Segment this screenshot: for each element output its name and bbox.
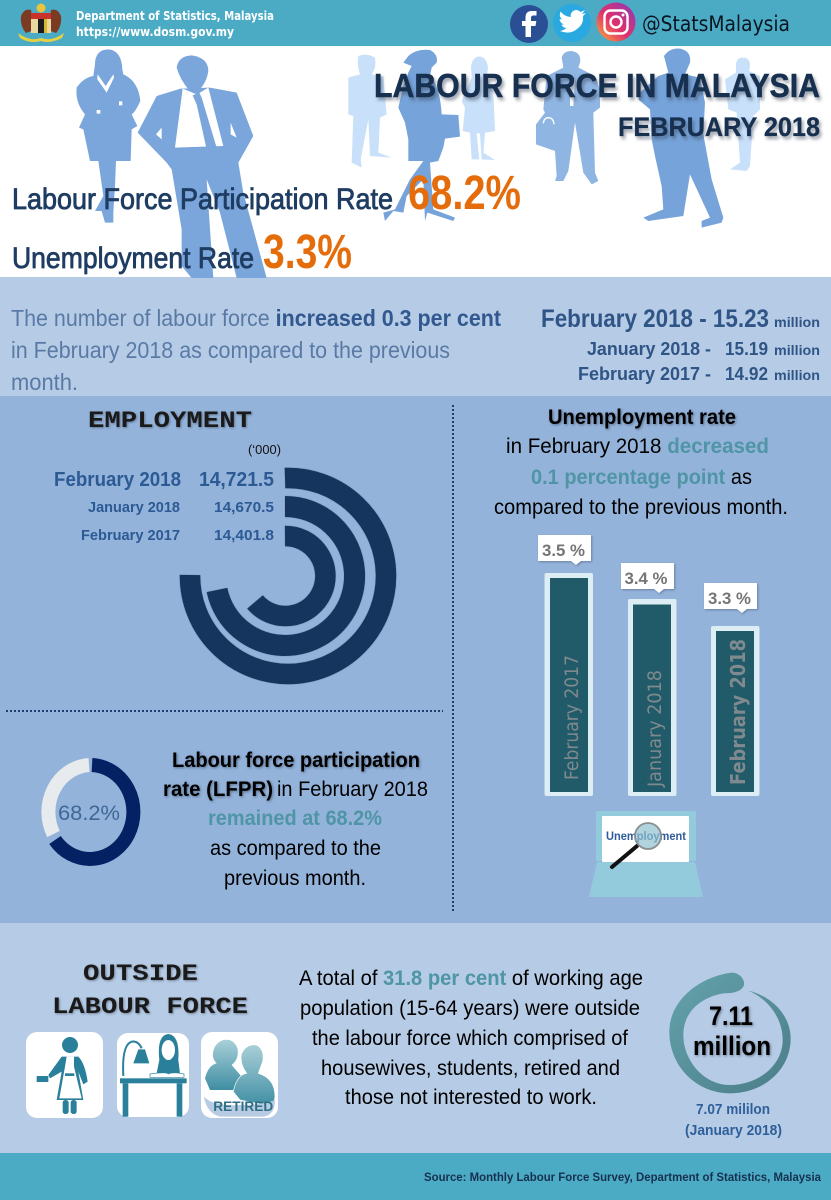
pale figure: man right [725, 58, 760, 171]
outside labour force heading: OUTSIDE [83, 961, 198, 987]
icon: instagram [596, 2, 636, 42]
panel: employment [54, 408, 386, 674]
headline rates: 3.3% [263, 226, 352, 279]
icon: Malaysian coat of arms [18, 4, 64, 42]
ring: 7.11 million [669, 973, 791, 1139]
left group: woman and man [76, 49, 267, 278]
employment table: 14,721.5 [199, 469, 274, 491]
employment table: 14,670.5 [214, 499, 274, 516]
ring: 7.11 million: 7.11 [709, 1001, 753, 1031]
title [374, 67, 820, 142]
figure: man right [638, 49, 723, 228]
callout: 3.4 %: 3.4 % [624, 569, 668, 588]
outside labour force text: those not interested to work. [345, 1086, 597, 1109]
labour force figures: January 2018 - [587, 339, 711, 359]
bar: February 2018: February 2018 [726, 639, 750, 785]
employment table: February 2017 [81, 527, 180, 544]
footer [0, 1153, 831, 1200]
labour force figures: 14.92 [725, 364, 768, 384]
labour force figures: 15.19 [725, 339, 768, 359]
labour force figures: million [774, 342, 820, 358]
icon: retired [201, 1032, 278, 1118]
bar: February 2018 [711, 626, 760, 796]
figure: man left [138, 55, 267, 278]
outside labour force text: housewives, students, retired and [321, 1057, 620, 1080]
outside labour force text [299, 967, 643, 1109]
footer: Source: Monthly Labour Force Survey, Department of Statistics, Malaysia [424, 1170, 821, 1184]
employment table: 14,401.8 [214, 527, 274, 544]
header bar [0, 0, 831, 46]
employment table: February 2018 [54, 469, 181, 491]
outside labour force heading [52, 961, 248, 1020]
headline rates [12, 167, 521, 279]
headline rates: Unemployment Rate [12, 242, 254, 275]
LFPR text: as compared to the [210, 837, 381, 860]
title: FEBRUARY 2018 [618, 112, 820, 142]
employment table [54, 469, 274, 544]
outside labour force text: the labour force which comprised of [312, 1027, 628, 1050]
employment heading: EMPLOYMENT [88, 408, 252, 434]
unemployment text: in February 2018 decreased [506, 435, 769, 458]
header text: Department of Statistics, Malaysia [76, 9, 274, 23]
middle group [348, 50, 495, 221]
bar: January 2018 [628, 599, 676, 796]
bar: February 2017: February 2017 [561, 655, 583, 780]
icon: laptop with magnifier: Unemployment [606, 831, 686, 843]
icon: housewife [26, 1032, 103, 1118]
labour force figures: million [774, 367, 820, 383]
callout: 3.4 % [621, 563, 674, 593]
bar: January 2018: January 2018 [644, 670, 666, 788]
labour force figures [541, 305, 820, 384]
outside labour force heading: LABOUR FORCE [52, 994, 248, 1020]
labour force figures: million [774, 314, 820, 330]
radial bar chart [190, 478, 386, 674]
unemployment text: Unemployment rate [548, 406, 736, 429]
donut chart: 68.2%: 68.2% [58, 802, 120, 825]
donut chart: 68.2% [48, 765, 133, 859]
unemployment text [494, 406, 788, 519]
LFPR text: previous month. [224, 867, 366, 890]
right group [536, 49, 760, 228]
headline rates: Labour Force Participation Rate [12, 183, 393, 216]
ring: 7.11 million: (January 2018) [685, 1122, 782, 1139]
dotted dividers [6, 405, 453, 913]
LFPR text [163, 749, 428, 890]
ring: 7.11 million: million [693, 1031, 771, 1061]
callout: 3.3 % [704, 583, 757, 613]
LFPR text: remained at 68.2% [208, 807, 382, 830]
employment table: January 2018 [88, 499, 180, 516]
icon: laptop with magnifier [589, 811, 703, 897]
LFPR text: rate (LFPR) [163, 778, 273, 801]
social handle: @StatsMalaysia [642, 12, 790, 36]
figure: woman left [76, 49, 140, 223]
labour force summary text [11, 305, 501, 395]
unemployment text: 0.1 percentage point as [531, 466, 752, 489]
hero silhouettes of workers [76, 49, 760, 278]
icon: twitter [553, 4, 591, 42]
panel: LFPR [48, 749, 428, 890]
header text [76, 9, 274, 39]
callout: 3.5 %: 3.5 % [542, 541, 585, 560]
icon: student [117, 1033, 189, 1117]
LFPR text: in February 2018 [277, 778, 428, 801]
icon: facebook [510, 5, 548, 43]
labour force figures: February 2017 - [578, 364, 711, 384]
figure: man with briefcase [536, 51, 600, 184]
labour force summary text: in February 2018 as compared to the previous [11, 337, 450, 363]
LFPR text: Labour force participation [172, 749, 420, 772]
callout: 3.5 % [538, 535, 591, 565]
unit label: (‘000) [248, 442, 281, 457]
labour force figures: February 2018 - 15.23 [541, 305, 769, 333]
unemployment text: compared to the previous month. [494, 496, 788, 519]
pale figure: man [348, 55, 392, 168]
panel: outside labour force [26, 961, 791, 1139]
labour force summary text: month. [11, 369, 78, 395]
headline rates: 68.2% [408, 167, 521, 220]
outside labour force text: A total of 31.8 per cent of working age [299, 967, 643, 990]
outside labour force text: population (15-64 years) were outside [300, 997, 640, 1020]
icon: retired: RETIRED [213, 1098, 273, 1114]
pale figure: woman [462, 57, 495, 160]
figure: woman with folder [383, 50, 460, 221]
header text: https://www.dosm.gov.my [76, 25, 234, 39]
bar: February 2017 [544, 573, 593, 796]
panel: unemployment rate [494, 406, 788, 897]
ring: 7.11 million: 7.07 mililon [696, 1101, 770, 1118]
callout: 3.3 %: 3.3 % [708, 589, 751, 608]
labour force summary text: The number of labour force increased 0.3 per cent [11, 305, 501, 331]
